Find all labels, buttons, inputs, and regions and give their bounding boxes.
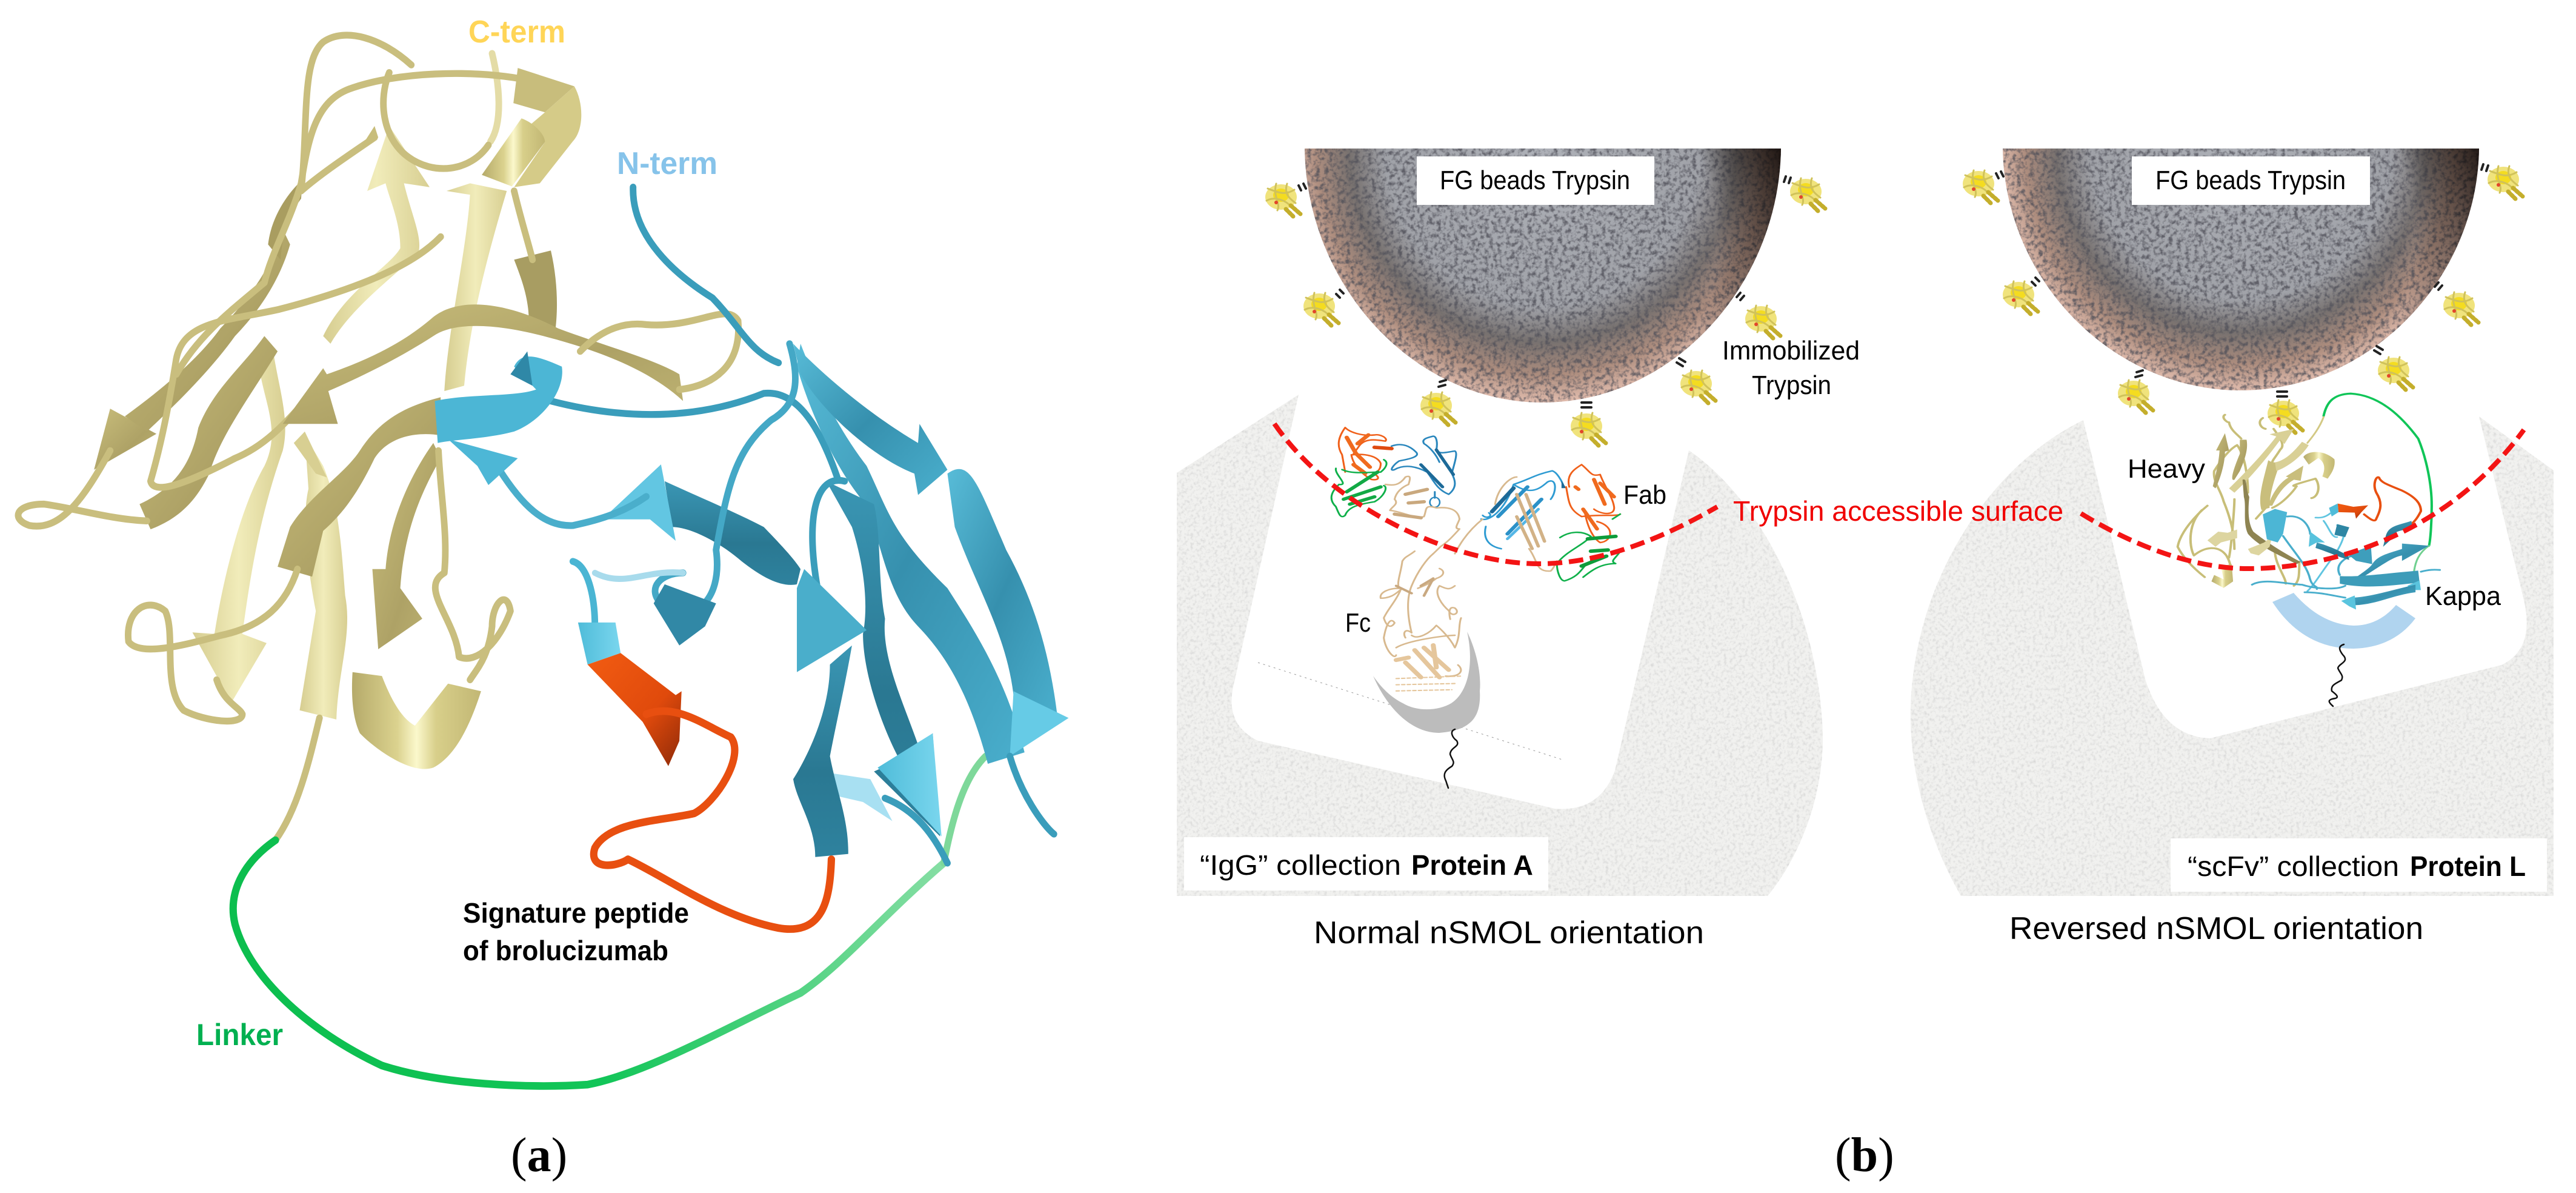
- left Fab constant fragment, tan: [1385, 476, 1460, 553]
- left accessible-surface arc, red dashed: [1274, 424, 1717, 564]
- blue arc: Protein L: [2272, 593, 2415, 649]
- right Fab heavy fragment, orange: [1566, 464, 1620, 543]
- label box: scFv collection Protein L: [2171, 838, 2547, 892]
- left Fab variable fragment, blue: [1391, 436, 1456, 507]
- left FG bead: [1303, 149, 1783, 403]
- signature peptide ribbon, orange: [588, 653, 831, 929]
- left Fab light fragment, green: [1331, 459, 1386, 516]
- right Fab variable fragment, blue: [1481, 471, 1566, 549]
- label: Fc: Fc: [1345, 608, 1371, 638]
- left Fab heavy fragment, orange: [1339, 427, 1391, 480]
- label box: IgG collection Protein A: [1184, 837, 1548, 891]
- label: immobilized trypsin: [1722, 336, 1860, 400]
- right Fab constant fragment, tan: [1455, 477, 1557, 571]
- crescent: Protein A, gray: [1373, 632, 1480, 733]
- label box: IgG collection Protein A: “IgG” collection: [1200, 849, 1401, 881]
- left well: stippled collection pore, Protein A: [1177, 388, 1831, 897]
- subtitle: Normal nSMOL orientation: Normal nSMOL orientation: [1314, 915, 1704, 951]
- linker, green: [233, 756, 986, 1086]
- IgG structure: left Fab, hinge, Fc, right Fab: [1331, 427, 1620, 691]
- icons: immobilized trypsin, left bead: [1265, 176, 1825, 446]
- protein A thin plane line: [1258, 663, 1564, 760]
- linker squiggle: Protein L: [2329, 644, 2345, 706]
- ribbon structure: light chain, blue: [435, 187, 1068, 863]
- caption: (b): (b): [1835, 1129, 1894, 1182]
- light domain, blue: [2252, 504, 2440, 610]
- linker arc, green: [2323, 393, 2432, 546]
- label: signature peptide: of brolucizumab: [463, 935, 668, 966]
- label: Heavy: Heavy: [2128, 454, 2205, 484]
- label: N-term: N-term: [617, 146, 717, 181]
- right bead label: [2132, 156, 2370, 205]
- heavy domain, khaki: [2178, 415, 2335, 588]
- panel b: nSMOL orientation diagrams: [1177, 149, 2557, 951]
- label: signature peptide: Signature peptide: [463, 897, 689, 929]
- label: signature peptide: [463, 897, 689, 966]
- left bead label: FG beads Trypsin: [1440, 165, 1630, 195]
- right bead label: FG beads Trypsin: [2155, 165, 2346, 195]
- label box: scFv collection Protein L: “scFv” collection: [2188, 850, 2399, 882]
- icons: immobilized trypsin, right bead: [1963, 164, 2523, 433]
- caption: (a): (a): [511, 1129, 567, 1182]
- signature peptide, orange: [2338, 477, 2421, 525]
- label: Linker: Linker: [196, 1018, 283, 1052]
- label box: IgG collection Protein A: Protein A: [1411, 849, 1533, 881]
- ribbon structure: heavy chain, tan: [18, 35, 739, 840]
- label: Kappa: Kappa: [2425, 581, 2501, 611]
- right FG bead: [2001, 149, 2481, 391]
- label: immobilized trypsin: Trypsin: [1752, 370, 1831, 400]
- linker squiggle: Protein A: [1445, 729, 1457, 788]
- subtitle: Reversed nSMOL orientation: Reversed nSMOL orientation: [2009, 911, 2423, 946]
- Fc fragment, tan: [1380, 551, 1461, 691]
- right Fab light fragment, green: [1557, 514, 1620, 581]
- right accessible-surface arc, red dashed: [2081, 430, 2524, 569]
- right well: stippled collection pore, Protein L: [1909, 412, 2557, 897]
- scFv structure in reversed orientation: [2178, 393, 2440, 610]
- label: C-term: C-term: [468, 15, 565, 50]
- left bead label: [1417, 156, 1654, 205]
- label: Fab: Fab: [1623, 480, 1666, 510]
- label: immobilized trypsin: Immobilized: [1722, 336, 1860, 366]
- label: Trypsin accessible surface: Trypsin accessible surface: [1733, 495, 2063, 527]
- panel a: brolucizumab scFv ribbon structure: [18, 15, 1068, 1086]
- label box: scFv collection Protein L: Protein L: [2410, 850, 2526, 882]
